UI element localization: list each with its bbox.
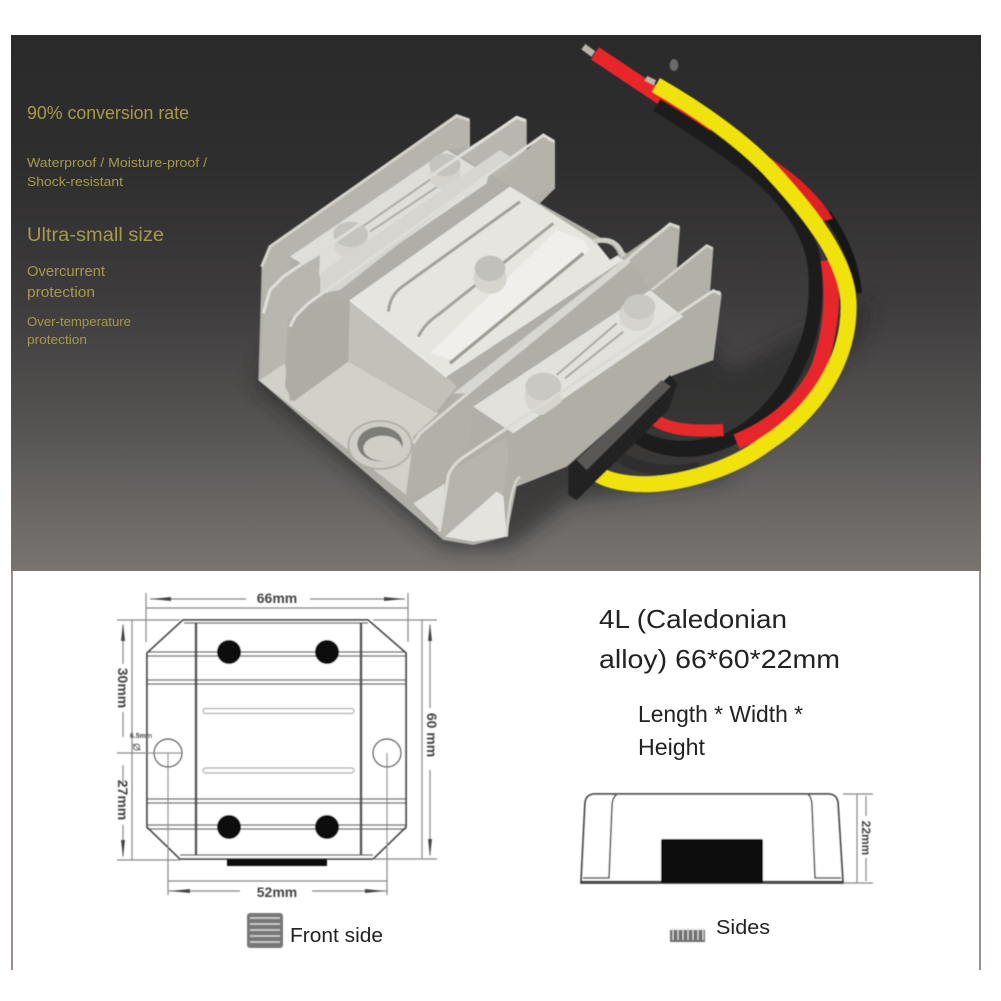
fin 3 lower [285, 300, 350, 402]
wire: yellow tip conductor [646, 78, 655, 83]
dimension lines [117, 593, 437, 895]
fin 1 face [262, 115, 470, 313]
caption: length width height [638, 701, 803, 760]
wires [583, 47, 858, 484]
wire: red bulge [763, 154, 833, 222]
central top [350, 187, 623, 377]
fin 5 upper [650, 245, 713, 313]
foot strip right [445, 492, 507, 542]
dimension arrows [121, 597, 432, 893]
strip between fins [320, 150, 510, 293]
right platform [473, 290, 683, 433]
central edge [350, 300, 447, 377]
fin 1 edge [262, 116, 469, 267]
fin 2 edge [263, 117, 526, 313]
photo panel background [11, 35, 981, 571]
feature: size: Ultra-small size [27, 225, 164, 246]
dimension labels [115, 590, 440, 900]
feature: over-temperature [27, 315, 131, 347]
far hole [597, 243, 618, 260]
feature: over-temperature: Over-temperature [27, 315, 131, 329]
foot strip left [413, 483, 445, 530]
diagram: front view [115, 590, 440, 900]
dimension labels: 27mm [115, 780, 131, 820]
wire: black outer [827, 213, 858, 293]
dimension 22mm: 22mm [859, 821, 873, 855]
dimension labels: 30mm [115, 668, 131, 708]
fin 2 upper [460, 118, 527, 180]
floor [258, 362, 438, 497]
connector [568, 375, 677, 500]
base line [581, 881, 844, 883]
connector block [661, 839, 763, 883]
structure lines [147, 623, 406, 855]
groove 1 [388, 202, 520, 312]
body outline [147, 620, 406, 859]
bolt back left [333, 222, 369, 259]
feature: waterproof: Shock-resistant [27, 174, 123, 189]
mounting hole [348, 421, 412, 469]
slot lower [203, 768, 354, 773]
feature: overcurrent: protection [27, 285, 95, 301]
dimension labels: 52mm [257, 884, 297, 900]
connector bar [227, 859, 327, 866]
wire: red short [653, 418, 723, 431]
dimension 22mm [843, 794, 873, 883]
inner lines [583, 794, 841, 878]
title: alloy and size: alloy) 66*60*22mm [599, 644, 840, 674]
wire: red tip conductor [583, 47, 593, 54]
far mounting ear [593, 240, 623, 257]
device [258, 115, 722, 545]
panel edge lines [12, 571, 980, 970]
dimension labels: 60 mm [424, 713, 440, 757]
fin 3 edge [290, 135, 554, 327]
back platform [290, 150, 488, 293]
bolt centre [473, 256, 507, 294]
feature: waterproof [27, 155, 207, 189]
wire: yellow [597, 85, 849, 484]
wire: black long [637, 105, 816, 450]
fin 5 edge [652, 246, 713, 290]
feature: overcurrent: Overcurrent [27, 264, 105, 280]
groove 3 [450, 253, 583, 363]
device and wire shadows [255, 300, 870, 548]
fin 4 edge [413, 224, 679, 443]
device silhouette [258, 115, 722, 545]
title: alloy and size: 4L (Caledonian [599, 604, 787, 634]
mounting holes [154, 739, 401, 767]
fin 2 lower [260, 255, 320, 380]
caption: length width height: Height [638, 734, 706, 760]
feature: conversion rate: 90% conversion rate [27, 103, 189, 123]
bolt right upper [619, 294, 655, 331]
central lower edge [453, 260, 633, 393]
outer wall [503, 295, 717, 537]
panel: product photo [258, 47, 858, 545]
fin 3 upper [497, 135, 555, 200]
groove 2 [418, 223, 553, 337]
feature: overcurrent [27, 264, 105, 301]
dimension labels: Ø [130, 743, 141, 751]
caption: length width height: Length * Width * [638, 701, 803, 727]
central bright strip [430, 230, 590, 360]
wire: black lower [617, 455, 700, 470]
label: sides: Sides [716, 917, 770, 939]
slot upper [203, 708, 354, 714]
feature: waterproof: Waterproof / Moisture-proof / [27, 155, 207, 170]
wire: screw [670, 59, 678, 71]
diagram: side view [581, 794, 873, 883]
dimension labels: 6.5mm [130, 733, 152, 740]
side outline [581, 794, 843, 883]
bolt back right [429, 154, 461, 190]
wire: black short [637, 435, 713, 447]
bolt right lower [525, 373, 562, 415]
back rail [360, 175, 445, 232]
label: front side: Front side [290, 925, 383, 947]
right rail [557, 323, 623, 378]
icon: sides heatsink [670, 928, 705, 942]
feature: over-temperature: protection [27, 333, 87, 347]
title: alloy and size [599, 604, 840, 674]
bolts [217, 640, 339, 839]
fin 4 upper face [627, 223, 680, 290]
feature list [27, 103, 207, 347]
wire: red lower [737, 260, 831, 442]
dimension labels: 66mm [257, 590, 297, 606]
fin 6 edge [439, 291, 721, 532]
wall fold [507, 477, 520, 537]
central front [348, 300, 457, 412]
wire: red top [595, 53, 710, 130]
fin 4 lower face [405, 397, 473, 502]
icon: front side heatsink [247, 913, 283, 948]
connector lit face [577, 380, 671, 470]
fin 6 lower face [440, 437, 510, 537]
